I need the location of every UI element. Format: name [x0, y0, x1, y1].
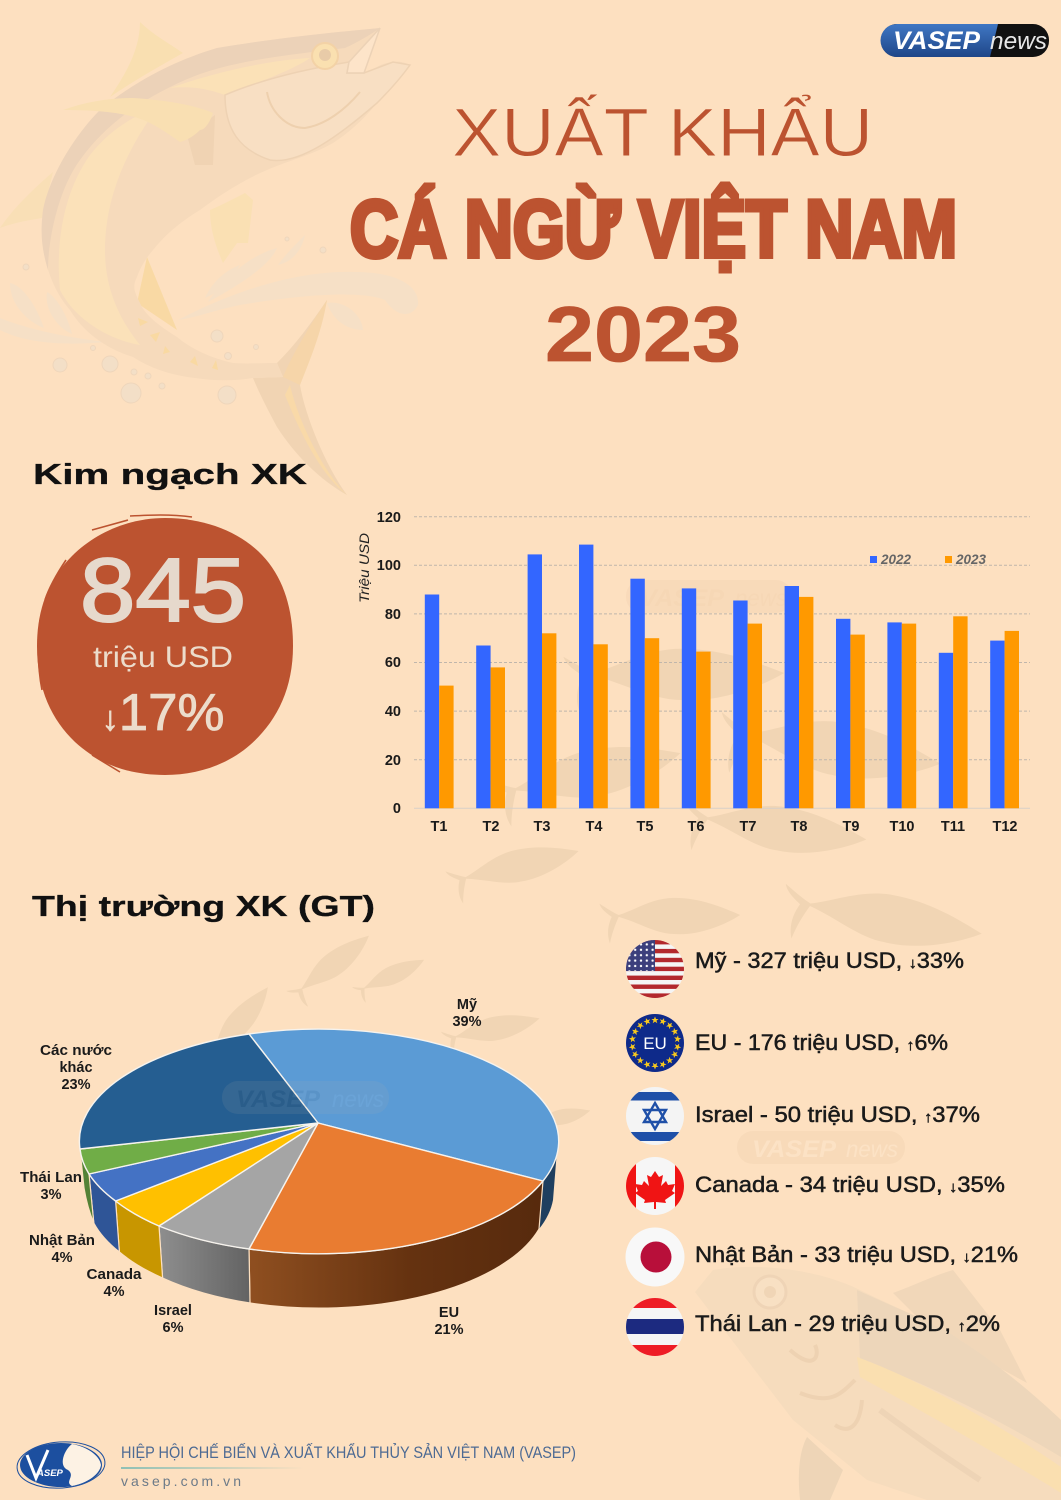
chart legend: 2023: [955, 551, 986, 567]
row: Canada flag: [626, 1157, 685, 1215]
chart gridlines: [414, 517, 1030, 808]
x axis labels: T11: [941, 819, 965, 835]
y axis labels: 0: [393, 801, 401, 817]
pie labels: 3%: [41, 1187, 62, 1203]
footer logo: VASEP globe: ASEP: [36, 1468, 64, 1479]
watermark: VASEP news mid right: [737, 1131, 905, 1164]
y axis labels: [377, 510, 401, 817]
pie watermark: news: [332, 1086, 384, 1112]
pie watermark: [222, 1081, 389, 1114]
title: [350, 94, 957, 378]
pie labels: Israel: [154, 1303, 192, 1319]
panel: total export value badge: [37, 515, 293, 775]
heading: Kim ngạch XK: Kim ngạch XK: [33, 459, 307, 491]
row text: USA: Mỹ - 327 triệu USD, ↓33%: [695, 948, 964, 973]
x axis labels: T6: [688, 819, 704, 835]
pie labels: Thái Lan: [20, 1170, 82, 1186]
row text: Thailand: Thái Lan - 29 triệu USD, ↑2%: [695, 1311, 1000, 1336]
panel: total export value badge: ↓17%: [102, 684, 224, 742]
row text: Canada: Canada - 34 triệu USD, ↓35%: [695, 1172, 1005, 1197]
x axis labels: T9: [843, 819, 859, 835]
y axis labels: 60: [385, 655, 401, 671]
x axis labels: [431, 819, 1018, 835]
logo: VASEP news: news: [990, 28, 1047, 55]
y axis title: Triệu USD: [356, 533, 372, 603]
chart legend: [870, 551, 986, 567]
pie labels: [20, 997, 482, 1338]
pie labels: 4%: [52, 1250, 73, 1266]
background illustration: large tuna bottom right: [752, 1270, 1061, 1500]
x axis labels: T8: [791, 819, 807, 835]
y axis labels: 80: [385, 607, 401, 623]
chart watermark: [626, 580, 792, 613]
x axis labels: T5: [637, 819, 653, 835]
pie top face slices: [79, 1029, 559, 1254]
bars 2023: [439, 597, 1019, 808]
y axis labels: 120: [377, 510, 401, 526]
row: Japan flag: [626, 1228, 684, 1286]
row: Thailand flag: [626, 1298, 684, 1356]
x axis labels: T12: [992, 819, 1018, 835]
logo: VASEP news: VASEP: [893, 27, 980, 55]
y axis labels: 40: [385, 704, 401, 720]
pie labels: Mỹ: [457, 997, 477, 1013]
pie labels: EU: [439, 1305, 459, 1321]
pie labels: Canada: [86, 1267, 142, 1283]
market list: [626, 940, 1018, 1356]
panel: total export value badge: triệu USD: [93, 641, 233, 674]
chart watermark: news: [735, 585, 787, 611]
footer text: vasep.com.vn: [121, 1473, 241, 1489]
y axis labels: 100: [377, 558, 401, 574]
logo: VASEP news: [881, 24, 1049, 57]
x axis labels: T10: [890, 819, 914, 835]
footer logo: VASEP globe: [16, 1439, 106, 1491]
row: EU flag: [626, 1014, 684, 1072]
pie labels: 21%: [434, 1322, 464, 1338]
title: XUẤT KHẨU: [452, 94, 873, 171]
pie labels: 4%: [104, 1284, 125, 1300]
panel: total export value badge: 845: [80, 541, 246, 641]
row text: Israel: Israel - 50 triệu USD, ↑37%: [695, 1102, 980, 1127]
pie chart: export markets: [20, 997, 559, 1338]
pie watermark: VASEP: [236, 1086, 321, 1113]
footer text: [121, 1443, 576, 1489]
x axis labels: T4: [586, 819, 602, 835]
background illustration: small fish silhouettes: [196, 649, 986, 1136]
chart watermark: VASEP: [640, 585, 725, 612]
x axis labels: T3: [534, 819, 550, 835]
watermark: VASEP news mid right: news: [846, 1136, 898, 1162]
watermark: VASEP news mid right: VASEP: [752, 1136, 837, 1163]
footer text: HIỆP HỘI CHẾ BIẾN VÀ XUẤT KHẨU THỦY SẢN VIỆT NAM (VASEP): [121, 1443, 576, 1462]
row: EU flag: EU: [643, 1034, 667, 1053]
background illustration: leaping tuna: [0, 22, 418, 495]
pie labels: 23%: [61, 1077, 91, 1093]
pie labels: 6%: [163, 1320, 184, 1336]
row text: EU: EU - 176 triệu USD, ↑6%: [695, 1030, 948, 1055]
row: Israel flag: [626, 1087, 684, 1145]
bars 2022: [425, 545, 1005, 808]
pie labels: Nhật Bản: [29, 1233, 95, 1249]
bar chart: monthly export value 2022 vs 2023: [356, 510, 1030, 835]
pie labels: 39%: [452, 1014, 482, 1030]
pie labels: Các nước: [40, 1043, 112, 1059]
chart legend: 2022: [880, 551, 911, 567]
x axis labels: T7: [740, 819, 756, 835]
pie side faces: [80, 1149, 557, 1308]
pie labels: khác: [59, 1060, 93, 1076]
y axis labels: 20: [385, 753, 401, 769]
x axis labels: T1: [431, 819, 447, 835]
row: USA flag: [626, 940, 684, 998]
title: 2023: [545, 290, 741, 378]
heading: Thị trường XK (GT): Thị trường XK (GT): [32, 891, 375, 923]
x axis labels: T2: [483, 819, 499, 835]
row text: Japan: Nhật Bản - 33 triệu USD, ↓21%: [695, 1242, 1018, 1267]
